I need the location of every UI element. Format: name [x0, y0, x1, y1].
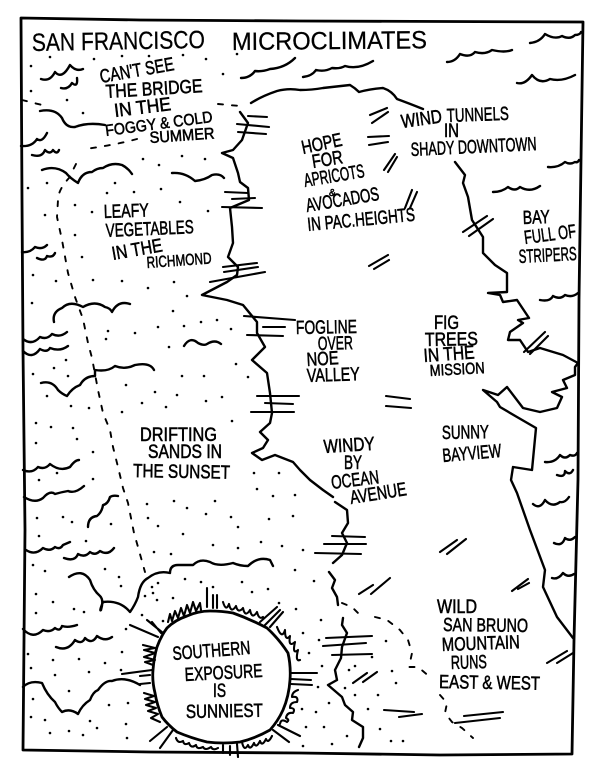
text: Can't see the bridge: IN THE: [113, 94, 172, 122]
text: Fogline over Noe Valley: NOE: [306, 348, 339, 371]
text: Fig trees in the Mission: MISSION: [429, 360, 485, 380]
title: [32, 26, 427, 57]
sun label: EXPOSURE: [184, 661, 263, 686]
text: Wild San Bruno Mountain: [437, 597, 541, 695]
dashed fog boundaries and hill lines: [22, 100, 473, 738]
text: Fogline over Noe Valley: VALLEY: [306, 364, 360, 387]
text: Windy by Ocean Avenue: WINDY: [323, 434, 375, 458]
text: Drifting sands in the Sunset: DRIFTING: [140, 425, 217, 446]
text: Hope for apricots: [300, 130, 416, 236]
text: Fogline over Noe Valley: FOGLINE: [296, 317, 357, 339]
text: Fig trees in the Mission: FIG: [434, 313, 459, 334]
text: Drifting sands in the Sunset: [133, 425, 231, 484]
text: Leafy vegetables: LEAFY: [103, 200, 149, 223]
text: Bay full of stripers: BAY: [522, 207, 550, 229]
text: Hope for apricots: FOR: [310, 147, 344, 173]
text: Bay full of stripers: FULL OF: [523, 221, 577, 249]
text: Hope for apricots: IN PAC.HEIGHTS: [306, 205, 416, 236]
wind hatch marks: [210, 108, 573, 723]
text: Wind tunnels: TUNNELS: [446, 104, 509, 127]
text: Leafy vegetables: RICHMOND: [146, 250, 212, 272]
text: Hope for apricots: &: [329, 188, 336, 199]
text: Can't see the bridge: SUMMER: [149, 125, 215, 147]
text: Wind tunnels: IN: [444, 121, 459, 142]
text: Hope for apricots: HOPE: [300, 130, 344, 159]
text: Can't see the bridge: [98, 54, 215, 147]
text: Fig trees in the Mission: [423, 313, 485, 380]
coastline: north shore: [251, 85, 423, 109]
text: Sunny Bayview: SUNNY: [442, 422, 489, 444]
sand dots: [28, 54, 403, 746]
text: Wild San Bruno Mountain: SAN BRUNO: [443, 615, 528, 637]
text: Wild San Bruno Mountain: EAST & WEST: [439, 672, 541, 695]
text: Sunny Bayview: [442, 422, 502, 467]
title: SAN FRANCISCO: [32, 26, 205, 57]
text: Sunny Bayview: BAYVIEW: [442, 441, 502, 467]
text: Leafy vegetables: [103, 200, 212, 272]
sun label: SUNNIEST: [186, 701, 263, 723]
coastline: east bay shore: [455, 162, 578, 638]
text: Windy by Ocean Avenue: [323, 434, 408, 509]
text: Hope for apricots: APRICOTS: [302, 161, 366, 192]
text: Drifting sands in the Sunset: THE SUNSET: [133, 461, 231, 484]
sun label: SOUTHERN: [172, 638, 251, 665]
text: Windy by Ocean Avenue: BY: [344, 453, 362, 474]
title: MICROCLIMATES: [232, 26, 427, 56]
text: Leafy vegetables: VEGETABLES: [105, 217, 194, 242]
sun label: [172, 638, 263, 723]
sun label: IS: [213, 681, 226, 702]
text: Hope for apricots: AVOCADOS: [304, 184, 381, 217]
text: Leafy vegetables: IN THE: [110, 235, 164, 265]
coastline: dunes edge: [202, 112, 363, 747]
text: Can't see the bridge: CAN'T SEE: [98, 54, 176, 88]
text: Wild San Bruno Mountain: RUNS: [451, 652, 487, 674]
sun disc: [153, 611, 290, 743]
sun: Southern Exposure: [122, 588, 317, 757]
text: Can't see the bridge: FOGGY & COLD: [104, 109, 214, 140]
sun rays: [122, 588, 317, 757]
text: Wind tunnels: SHADY DOWNTOWN: [410, 134, 537, 161]
text: Wild San Bruno Mountain: MOUNTAIN: [441, 632, 520, 656]
text: Fig trees in the Mission: TREES: [425, 329, 478, 351]
text: Fogline over Noe Valley: [296, 317, 360, 387]
text: Can't see the bridge: THE BRIDGE: [105, 76, 203, 103]
text: Drifting sands in the Sunset: SANDS IN: [148, 442, 222, 463]
text: Wild San Bruno Mountain: WILD: [437, 597, 477, 618]
text: Fogline over Noe Valley: OVER: [318, 333, 353, 355]
text: Bay full of stripers: [518, 207, 577, 268]
text: Wind tunnels: WIND: [400, 106, 443, 133]
text: Windy by Ocean Avenue: AVENUE: [348, 479, 408, 509]
text: Wind tunnels: [400, 104, 537, 161]
text: Fig trees in the Mission: IN THE: [423, 342, 475, 367]
text: Windy by Ocean Avenue: OCEAN: [330, 467, 380, 494]
